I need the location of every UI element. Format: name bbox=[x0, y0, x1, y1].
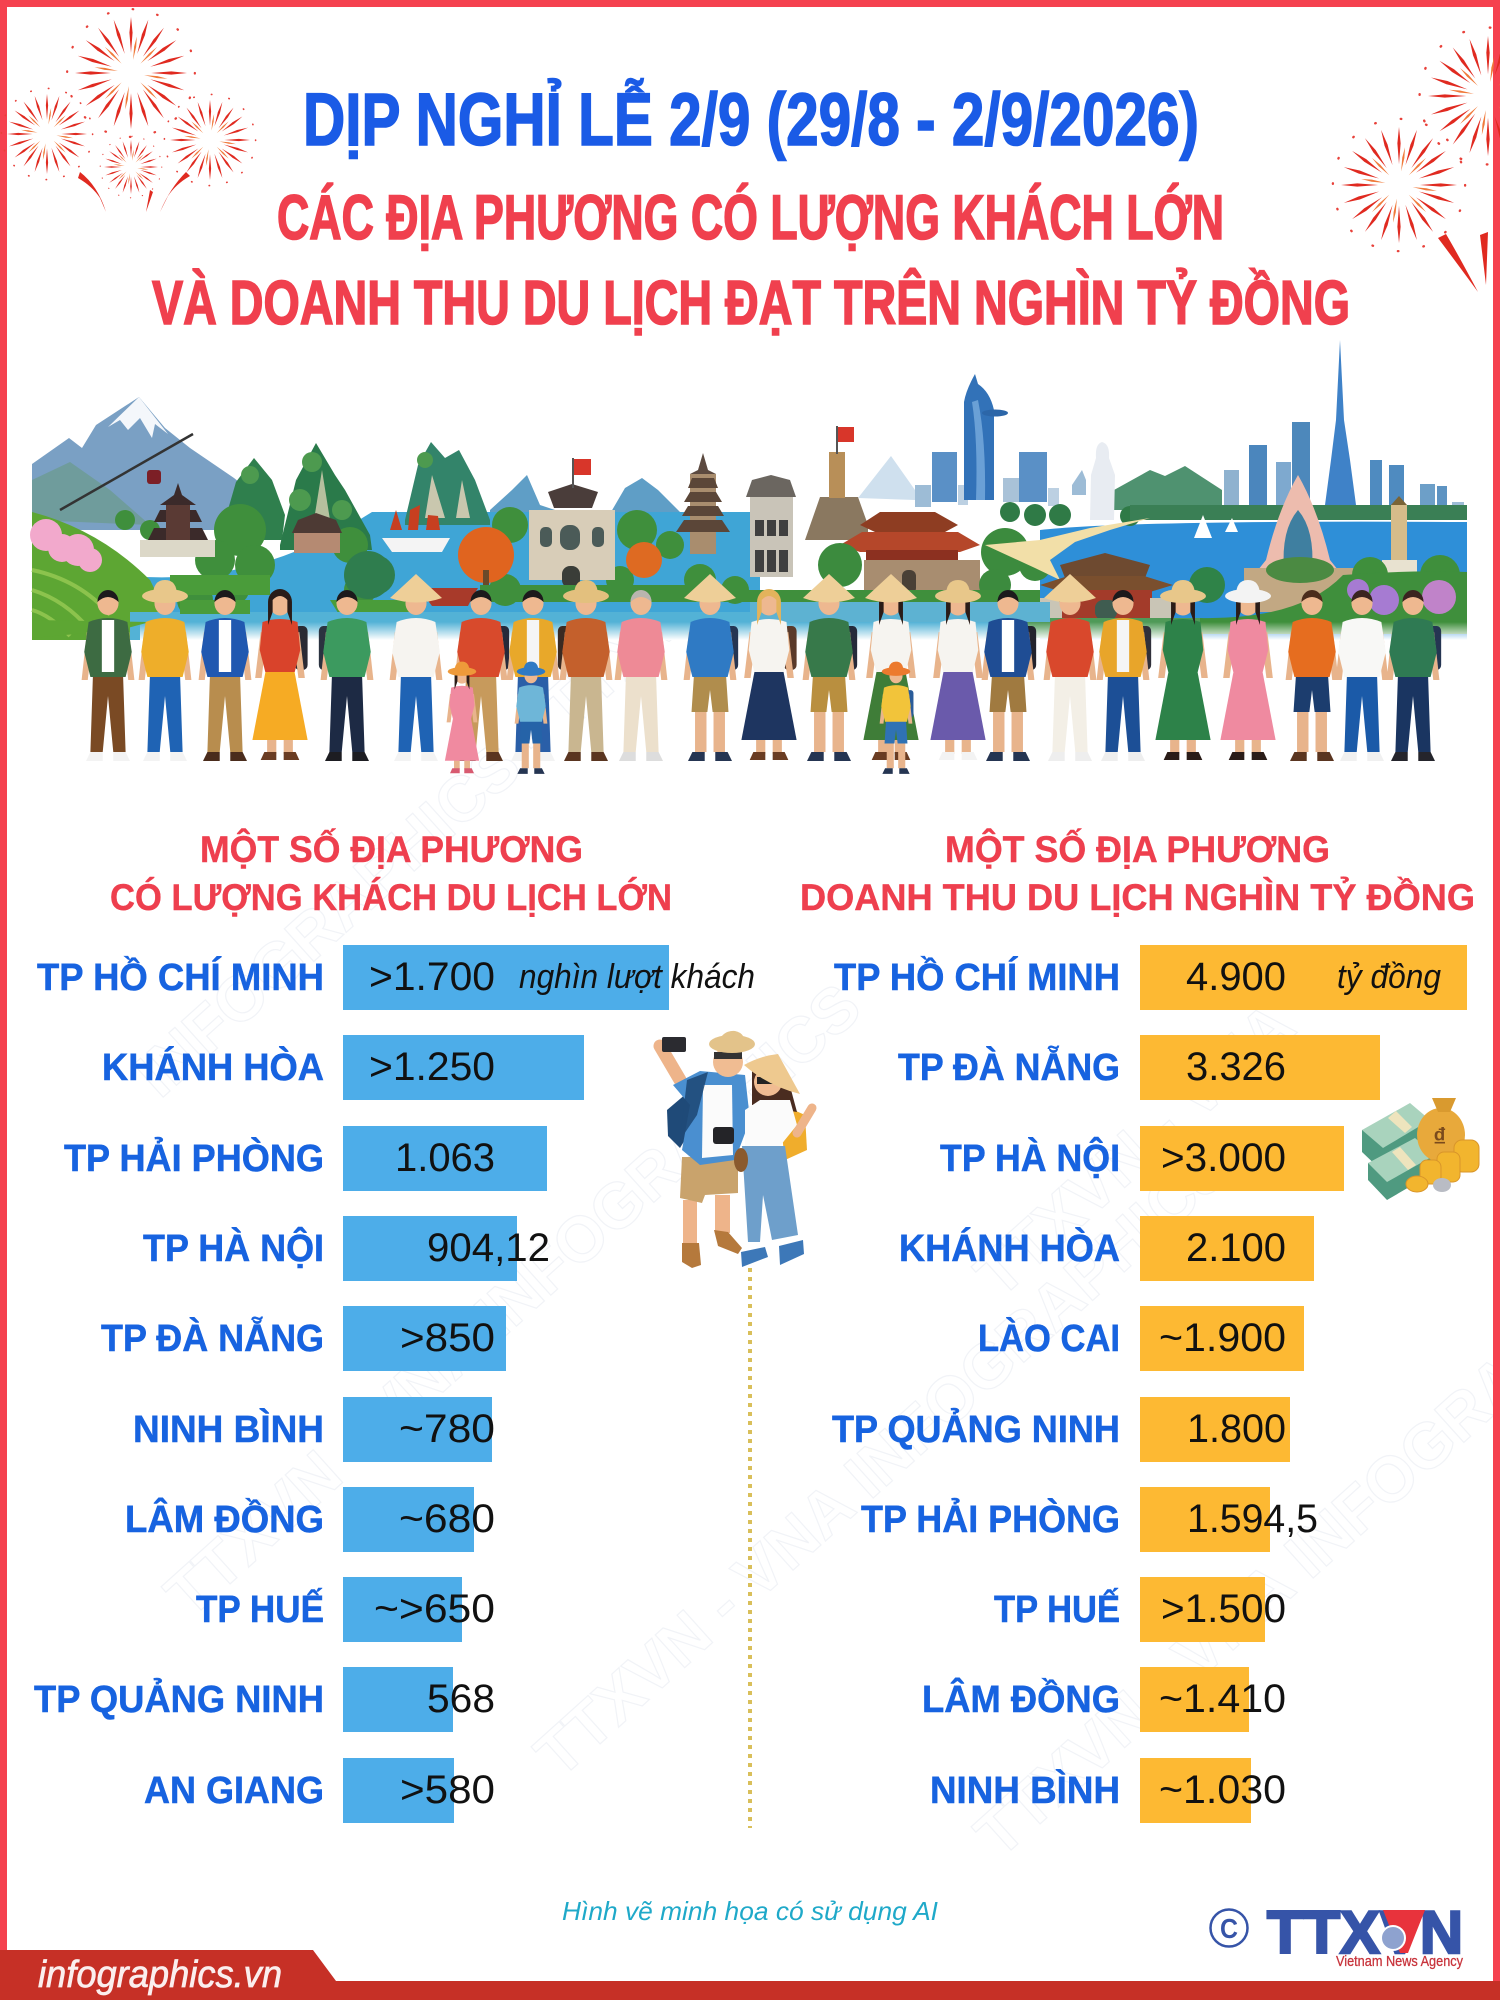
copyright mark bbox=[1210, 1910, 1248, 1946]
row: TP Hải Phòng: TP HẢI PHÒNG bbox=[64, 1136, 324, 1180]
heading: right column: MỘT SỐ ĐỊA PHƯƠNG bbox=[945, 828, 1330, 870]
row: Lâm Đồng bbox=[922, 1667, 1286, 1732]
row: TP Quảng Ninh bbox=[34, 1667, 495, 1732]
row: TP Đà Nẵng bbox=[101, 1306, 506, 1371]
coins bbox=[1406, 1140, 1479, 1192]
row: TP Hồ Chí Minh bbox=[37, 945, 755, 1010]
pink cathedral bbox=[1244, 475, 1358, 612]
row: TP Huế bbox=[196, 1577, 495, 1642]
row: Ninh Bình: NINH BÌNH bbox=[930, 1768, 1120, 1812]
row: TP Hồ Chí Minh: nghìn lượt khách bbox=[519, 958, 755, 996]
far skyline bbox=[915, 340, 1464, 516]
row: TP Đà Nẵng: 3.326 bbox=[1186, 1045, 1286, 1089]
row: TP Hồ Chí Minh: TP HỒ CHÍ MINH bbox=[834, 955, 1120, 999]
row: Lào Cai bbox=[978, 1306, 1304, 1371]
Turtle tower bbox=[746, 475, 796, 577]
row: TP Hà Nội: TP HÀ NỘI bbox=[940, 1135, 1120, 1180]
beach bbox=[985, 518, 1150, 580]
heading: left column bbox=[110, 828, 672, 918]
row: Lâm Đồng: LÂM ĐỒNG bbox=[922, 1677, 1120, 1721]
banknote stacks bbox=[1362, 1120, 1430, 1172]
icon: money and coins: ₫ bbox=[1433, 1122, 1446, 1152]
mountains bbox=[32, 397, 275, 530]
row: Lâm Đồng: ~1.410 bbox=[1159, 1677, 1286, 1721]
row: TP Hồ Chí Minh: tỷ đồng bbox=[1337, 958, 1441, 996]
palm bbox=[1189, 567, 1225, 603]
tourist group left bbox=[80, 574, 738, 761]
palace bbox=[840, 512, 980, 598]
pagoda left bbox=[140, 483, 215, 557]
cable car bbox=[60, 434, 193, 510]
orange trees bbox=[458, 527, 514, 583]
watermark pattern: INFOGRAPHICS - TTXVN bbox=[121, 550, 732, 1110]
blossom trees bbox=[30, 519, 102, 572]
kids left bbox=[445, 662, 548, 774]
row: TP Hà Nội: >3.000 bbox=[1161, 1136, 1286, 1180]
trees centre right bbox=[818, 502, 1467, 601]
illustration: group of tourists bbox=[80, 574, 1441, 774]
bridge bbox=[858, 456, 915, 500]
red bridge bbox=[420, 588, 478, 606]
lighthouse bbox=[1382, 496, 1417, 578]
row: TP Hải Phòng: TP HẢI PHÒNG bbox=[861, 1497, 1120, 1541]
row: TP Hải Phòng: 1.063 bbox=[395, 1136, 495, 1180]
flag tower bbox=[805, 426, 868, 540]
site name: infographics.vn bbox=[38, 1954, 282, 1996]
row: TP Hồ Chí Minh: >1.700 bbox=[369, 955, 495, 999]
row: Lâm Đồng: LÂM ĐỒNG bbox=[125, 1497, 324, 1541]
row: TP Hải Phòng bbox=[861, 1487, 1318, 1552]
wordmark: TTXVN bbox=[1267, 1899, 1463, 1966]
fade to white bbox=[140, 622, 1467, 640]
karst temple bbox=[292, 513, 342, 533]
watermark pattern: TTXVN - VNA INFOGRAPHICS bbox=[521, 1129, 1244, 1790]
row: TP Đà Nẵng: TP ĐÀ NẴNG bbox=[898, 1045, 1120, 1089]
bar chart: tourism revenue by locality bbox=[832, 945, 1467, 1823]
row: Lâm Đồng bbox=[125, 1487, 495, 1552]
row: TP Huế: ~>650 bbox=[374, 1587, 495, 1631]
distant karst bbox=[490, 475, 680, 520]
Hoi An temple bbox=[1040, 553, 1173, 620]
junk boat bbox=[382, 505, 450, 552]
green trees bbox=[115, 504, 750, 618]
sailboats bbox=[1194, 515, 1238, 538]
row: Lào Cai: LÀO CAI bbox=[978, 1316, 1120, 1360]
buddha statue bbox=[1090, 442, 1115, 520]
row: An Giang bbox=[144, 1758, 495, 1823]
karst islands bbox=[225, 458, 285, 540]
row: Ninh Bình: ~780 bbox=[399, 1407, 495, 1451]
copyright mark: C bbox=[1220, 1913, 1238, 1944]
watermark pattern bbox=[121, 550, 1500, 1870]
bar chart: visitors by locality bbox=[34, 945, 755, 1823]
watermark pattern: TTXVN - VNA bbox=[961, 988, 1308, 1310]
row: TP Hồ Chí Minh: 4.900 bbox=[1186, 955, 1286, 999]
row: Ninh Bình: ~1.030 bbox=[1159, 1768, 1286, 1812]
row: Ninh Bình: NINH BÌNH bbox=[133, 1407, 324, 1451]
icon: money and coins bbox=[1362, 1098, 1479, 1200]
central island tree bbox=[344, 551, 392, 599]
purple flowers bbox=[1347, 579, 1456, 615]
row: Khánh Hòa: KHÁNH HÒA bbox=[899, 1226, 1120, 1270]
row: TP Đà Nẵng bbox=[898, 1035, 1380, 1100]
row: TP Quảng Ninh: 568 bbox=[427, 1677, 495, 1721]
tourist group right bbox=[741, 574, 1441, 774]
row: Ninh Bình bbox=[133, 1397, 495, 1462]
row: Khánh Hòa: >1.250 bbox=[369, 1045, 495, 1089]
row: TP Hải Phòng: 1.594,5 bbox=[1187, 1497, 1318, 1541]
row: TP Hà Nội bbox=[143, 1216, 550, 1281]
logo: TTXVN bbox=[1210, 1899, 1463, 1970]
heading: left column: CÓ LƯỢNG KHÁCH DU LỊCH LỚN bbox=[110, 876, 672, 918]
red V and globe bbox=[1381, 1910, 1425, 1953]
row: TP Huế: TP HUẾ bbox=[196, 1587, 324, 1631]
row: Lào Cai: ~1.900 bbox=[1159, 1316, 1286, 1360]
row: TP Hà Nội: TP HÀ NỘI bbox=[143, 1225, 324, 1270]
heading: right column: DOANH THU DU LỊCH NGHÌN TỶ ĐỒNG bbox=[800, 876, 1475, 918]
fireworks top right bbox=[1318, 12, 1500, 292]
row: TP Hải Phòng bbox=[64, 1126, 547, 1191]
water bbox=[120, 512, 760, 640]
watermark pattern: TTXVN - VNA INFOGRAPHICS bbox=[151, 969, 874, 1630]
row: TP Quảng Ninh: TP QUẢNG NINH bbox=[832, 1407, 1120, 1451]
dotted divider bbox=[748, 1268, 752, 1828]
row: Ninh Bình bbox=[930, 1758, 1286, 1823]
man bbox=[660, 1031, 755, 1268]
green hill bbox=[1114, 466, 1222, 510]
pagoda tall bbox=[676, 453, 730, 554]
note: AI illustration: Hình vẽ minh họa có sử dụng AI bbox=[562, 1896, 938, 1926]
title line 1: DỊP NGHỈ LỄ 2/9 (29/8 - 2/9/2026) bbox=[303, 78, 1199, 161]
row: TP Quảng Ninh: 1.800 bbox=[1187, 1407, 1286, 1451]
row: An Giang: >580 bbox=[400, 1768, 495, 1812]
row: TP Huế: TP HUẾ bbox=[994, 1587, 1120, 1631]
footer bar bbox=[0, 1950, 1500, 2000]
lake bottom band bbox=[130, 612, 1000, 640]
row: TP Hồ Chí Minh: TP HỒ CHÍ MINH bbox=[37, 955, 324, 999]
row: Khánh Hòa bbox=[899, 1216, 1314, 1281]
left terrace hill bbox=[32, 512, 180, 640]
row: TP Hà Nội bbox=[940, 1126, 1344, 1191]
fireworks top left bbox=[0, 0, 266, 212]
row: Lâm Đồng: ~680 bbox=[399, 1497, 495, 1541]
row: TP Hà Nội: 904,12 bbox=[427, 1226, 550, 1270]
illustration: couple taking selfie bbox=[660, 1031, 812, 1268]
heading: left column: MỘT SỐ ĐỊA PHƯƠNG bbox=[200, 828, 583, 870]
row: TP Đà Nẵng: TP ĐÀ NẴNG bbox=[101, 1316, 324, 1360]
title bbox=[152, 78, 1350, 338]
woman bbox=[734, 1054, 812, 1267]
row: TP Quảng Ninh bbox=[832, 1397, 1290, 1462]
row: TP Hồ Chí Minh bbox=[834, 945, 1467, 1010]
tagline: Vietnam News Agency bbox=[1336, 1953, 1463, 1970]
row: TP Quảng Ninh: TP QUẢNG NINH bbox=[34, 1677, 324, 1721]
row: TP Huế: >1.500 bbox=[1161, 1587, 1286, 1631]
row: An Giang: AN GIANG bbox=[144, 1770, 324, 1812]
heading: right column bbox=[800, 828, 1475, 918]
money bag bbox=[1417, 1108, 1465, 1162]
row: TP Huế bbox=[994, 1577, 1286, 1642]
trees right bbox=[1200, 555, 1467, 634]
row: Khánh Hòa bbox=[102, 1035, 584, 1100]
Hanoi gate bbox=[529, 458, 615, 588]
row: TP Đà Nẵng: >850 bbox=[400, 1316, 495, 1360]
illustration: landscape panorama of Vietnam bbox=[30, 340, 1467, 640]
row: Khánh Hòa: KHÁNH HÒA bbox=[102, 1045, 324, 1089]
row: Khánh Hòa: 2.100 bbox=[1186, 1226, 1286, 1270]
